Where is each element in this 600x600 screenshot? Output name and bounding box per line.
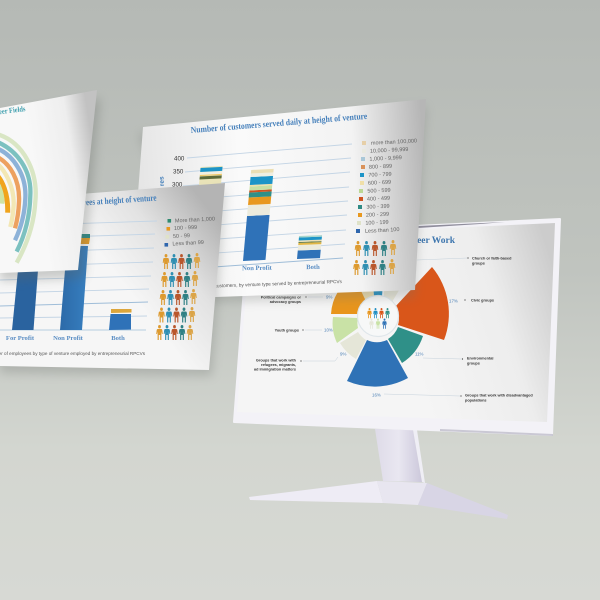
y axis labels: res xyxy=(158,176,166,186)
callout: refugees and migrants: refugees, migrants, xyxy=(261,363,296,367)
employees legend: 50 - 99 xyxy=(173,233,190,240)
callout: disadvantaged populations: Groups that work with disadvantaged xyxy=(465,394,533,398)
employees legend: More than 1,000 xyxy=(175,216,215,224)
chart title: volunteer work: Types of Volunteer Work xyxy=(354,236,456,246)
callout: refugees and migrants: Groups that work with xyxy=(256,358,297,362)
people icons: employees xyxy=(156,253,200,340)
callout: environmental groups: 11% xyxy=(415,352,424,356)
category labels xyxy=(242,264,320,272)
customers legend: 200 - 299 xyxy=(366,212,389,219)
callout: environmental groups: groups xyxy=(467,362,480,366)
employees legend: Less than 99 xyxy=(172,240,204,247)
callout: political campaigns xyxy=(261,294,332,304)
stacked bar: both employees xyxy=(109,309,132,330)
callout: political campaigns: 9% xyxy=(326,294,332,300)
donut chart xyxy=(331,267,449,387)
monitor screen xyxy=(237,223,555,422)
customers legend: 700 - 799 xyxy=(368,172,392,179)
y axis labels xyxy=(158,156,185,188)
category labels: Both xyxy=(306,264,320,271)
y axis labels: 350 xyxy=(173,168,184,176)
employees legend xyxy=(164,216,215,247)
callout: refugees and migrants: ad immigration matters xyxy=(254,368,296,372)
customers legend xyxy=(356,138,417,235)
callout: disadvantaged populations: 16% xyxy=(372,392,381,398)
callout: church or faith-based groups xyxy=(417,256,512,266)
customers legend: 400 - 499 xyxy=(367,196,390,203)
people icons: customers xyxy=(353,240,396,275)
callout: civic groups: 17% xyxy=(449,298,458,304)
callout: civic groups: Civic groups xyxy=(471,298,494,302)
employee category labels: Non Profit xyxy=(53,335,84,342)
panel: customers served daily xyxy=(130,99,426,302)
customers caption: Number of customers, by venture type served by entrepreneurial RPCVs xyxy=(191,279,343,289)
employee category labels xyxy=(6,335,125,342)
customers legend: 10,000 - 99,999 xyxy=(370,147,409,155)
callout: youth groups: Youth groups xyxy=(275,328,299,332)
callout: church or faith-based groups: Church or faith-based xyxy=(472,256,512,260)
customers legend: 500 - 599 xyxy=(367,188,391,195)
stacked bar: non profit xyxy=(243,169,274,261)
monitor xyxy=(234,219,560,436)
employees legend: 100 - 999 xyxy=(174,225,197,232)
stacked bar: non profit employees xyxy=(60,234,90,330)
employee category labels: Both xyxy=(111,335,125,342)
callout: disadvantaged populations: populations xyxy=(465,398,487,402)
callout: church or faith-based groups: groups xyxy=(472,262,485,266)
monitor stand xyxy=(249,429,508,519)
callout: youth groups: 10% xyxy=(324,328,333,332)
y axis labels: 300 xyxy=(172,182,183,188)
callout: disadvantaged populations xyxy=(372,392,533,402)
callout: environmental groups xyxy=(415,352,493,366)
callout: youth groups xyxy=(275,328,333,332)
category labels: Non Profit xyxy=(242,265,273,272)
customers legend: Less than 100 xyxy=(365,227,400,235)
customers legend: more than 100,000 xyxy=(371,138,417,147)
employee category labels: For Profit xyxy=(6,335,35,342)
customers legend: 800 - 899 xyxy=(369,164,392,171)
panel: employees xyxy=(0,183,225,376)
callout: political campaigns: Political campaigns or xyxy=(261,296,302,300)
y axis labels: 400 xyxy=(174,156,185,162)
customers legend: 1,000 - 9,999 xyxy=(369,155,402,163)
employees title: Number of employees at height of venture xyxy=(28,193,157,211)
callout: refugees and migrants xyxy=(254,352,346,372)
customers legend: 600 - 699 xyxy=(368,180,391,187)
callout: civic groups xyxy=(449,298,494,304)
bar: for profit xyxy=(12,270,38,330)
donut centre with people icon xyxy=(358,296,398,336)
panel: volunteer fields xyxy=(0,90,100,281)
customers legend: 300 - 399 xyxy=(366,204,390,211)
stacked bar: both xyxy=(297,235,322,259)
callout: political campaigns: advocacy groups xyxy=(270,300,301,304)
callout: environmental groups: Environmental xyxy=(467,356,493,360)
customers title: Number of customers served daily at height of venture xyxy=(190,111,368,135)
stacked bar: for profit xyxy=(199,166,223,185)
callout: refugees and migrants: 9% xyxy=(340,352,346,356)
customers legend: 100 - 199 xyxy=(365,220,389,227)
arc chart xyxy=(0,134,36,263)
